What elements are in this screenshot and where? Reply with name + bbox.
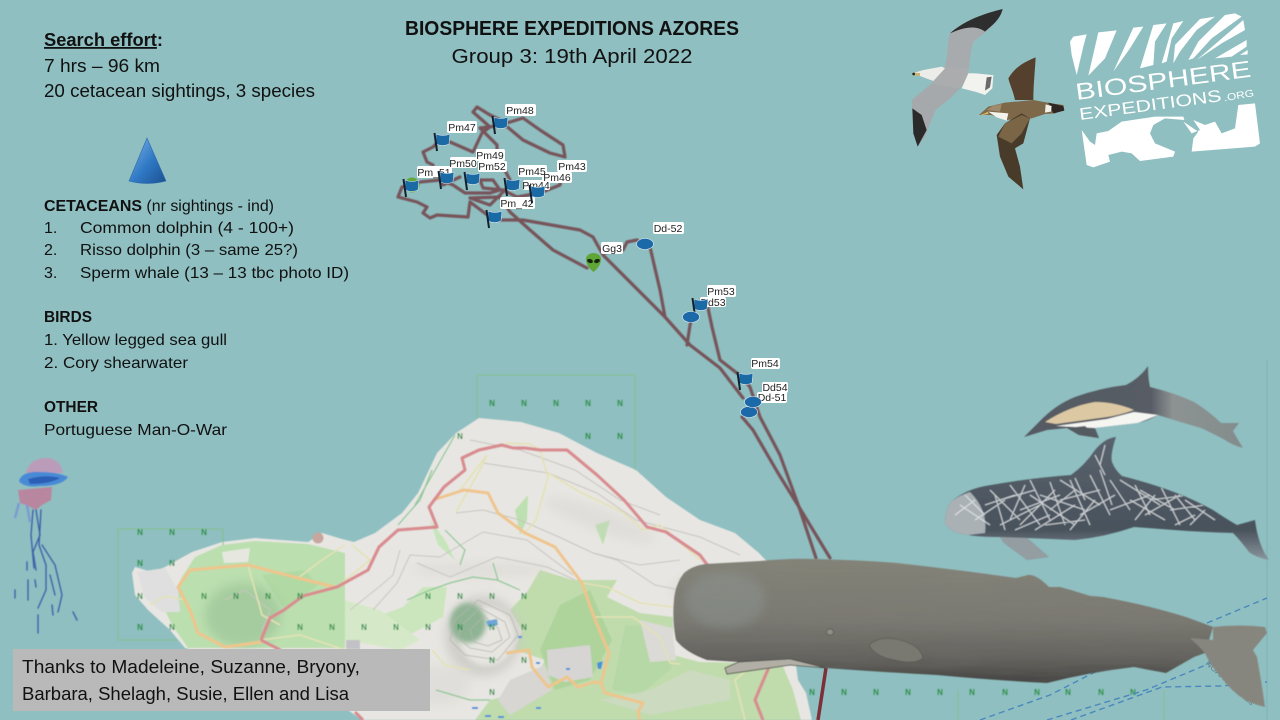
map N grid: nature reserve boxes: N — [841, 688, 847, 697]
map N grid: nature reserve boxes: N — [361, 623, 367, 632]
cetaceans: 3. — [44, 265, 57, 282]
thanks box: Barbara, Shelagh, Susie, Ellen and Lisa — [22, 684, 350, 704]
whale-side track below whale — [818, 668, 826, 720]
birds: BIRDS — [44, 309, 92, 326]
map N grid: nature reserve boxes: N — [457, 623, 463, 632]
map labels: Pm47 — [448, 122, 476, 134]
icon: yellow legged gull — [912, 9, 1003, 147]
vegetation areas — [160, 495, 801, 720]
blue water and place marks — [472, 636, 603, 718]
map N grid: nature reserve boxes: N — [1065, 688, 1071, 697]
alien markers — [404, 178, 601, 272]
blue oval markers — [636, 238, 762, 418]
other: OTHER — [44, 399, 98, 416]
map N grid: nature reserve boxes: N — [169, 623, 175, 632]
map labels: Pm53 — [707, 286, 735, 298]
map N grid: nature reserve boxes: N — [169, 528, 175, 537]
map N grid: nature reserve boxes: N — [393, 623, 399, 632]
flags — [404, 116, 753, 390]
logo wordmark: BIOSPHERE — [1074, 56, 1252, 105]
logo: Biosphere Expeditions — [1070, 13, 1260, 167]
map labels: Pm_51 — [417, 167, 451, 179]
map N grid: nature reserve boxes: N — [137, 559, 143, 568]
map N grid: nature reserve boxes: N — [1098, 688, 1104, 697]
map N grid: nature reserve boxes: N — [137, 528, 143, 537]
search effort text: Search effort: — [44, 30, 163, 50]
search effort text — [44, 30, 315, 101]
map labels: Pm45 — [518, 166, 546, 178]
map N grid: nature reserve boxes — [118, 375, 1164, 720]
NOAA label: NOAA Fisheries — [1204, 659, 1256, 707]
map labels: Pm_42 — [500, 198, 534, 210]
flag and marker sightings — [404, 116, 762, 418]
secondary roads — [150, 443, 750, 720]
map N grid: nature reserve boxes: N — [425, 623, 431, 632]
map N grid: nature reserve boxes: N — [137, 623, 143, 632]
survey track — [398, 107, 830, 558]
map N grid: nature reserve boxes: N — [521, 592, 527, 601]
map N grid: nature reserve boxes: N — [585, 399, 591, 408]
birds: 2. Cory shearwater — [44, 355, 189, 372]
map labels — [417, 104, 788, 404]
map labels: Pm50 — [449, 158, 477, 170]
map N grid: nature reserve boxes: N — [553, 399, 559, 408]
map N grid: nature reserve boxes: N — [457, 592, 463, 601]
urban grey patches — [137, 532, 730, 715]
icon: common dolphin — [1024, 366, 1243, 448]
cetaceans: Sperm whale (13 – 13 tbc photo ID) — [80, 265, 349, 282]
cetaceans: Risso dolphin (3 – same 25?) — [80, 242, 298, 259]
map N grid: nature reserve boxes: N — [169, 559, 175, 568]
logo world map — [1082, 103, 1260, 167]
map N grid: nature reserve boxes: N — [969, 688, 975, 697]
label group background — [417, 104, 788, 403]
cetaceans: 1. — [44, 220, 57, 237]
map labels: Pm48 — [506, 105, 534, 117]
icon: Risso's dolphin — [945, 437, 1269, 560]
search effort text: 20 cetacean sightings, 3 species — [44, 81, 315, 101]
map labels: Pm46 — [543, 172, 571, 184]
soft hill shading — [410, 488, 730, 705]
map N grid: nature reserve boxes: N — [457, 432, 463, 441]
logo wordmark — [1074, 56, 1255, 124]
cetaceans: Common dolphin (4 - 100+) — [80, 220, 294, 237]
logo wordmark: .ORG — [1223, 88, 1255, 104]
map labels: Pm44 — [522, 180, 550, 192]
map N grid: nature reserve boxes: N — [265, 592, 271, 601]
map N grid: nature reserve boxes: N — [873, 688, 879, 697]
NOAA fisheries boundary lines — [980, 360, 1267, 720]
map labels: Pm43 — [558, 161, 586, 173]
map labels: Pm49 — [476, 150, 504, 162]
map N grid: nature reserve boxes: N — [297, 623, 303, 632]
map N grid: nature reserve boxes: N — [489, 623, 495, 632]
birds: 1. Yellow legged sea gull — [44, 332, 227, 349]
logo wordmark: EXPEDITIONS — [1078, 86, 1223, 124]
map labels: Dd54 — [762, 382, 788, 394]
map labels: Dd-51 — [758, 392, 786, 404]
pink primary road — [261, 445, 769, 720]
title — [405, 18, 739, 68]
thanks box — [13, 649, 430, 711]
map labels: Dd-52 — [654, 223, 682, 235]
logo stripes — [1070, 13, 1248, 76]
whale eye — [826, 629, 834, 635]
map N grid: nature reserve boxes: N — [937, 688, 943, 697]
map N grid: nature reserve boxes: N — [233, 592, 239, 601]
whale tail fluke — [1190, 626, 1267, 707]
map N grid: nature reserve boxes: N — [1034, 688, 1040, 697]
whale head highlight — [685, 572, 765, 628]
western volcano shading — [205, 583, 281, 647]
map N grid: nature reserve boxes: N — [1002, 688, 1008, 697]
contour lines — [225, 440, 740, 630]
map labels: Pm52 — [478, 161, 506, 173]
whale jaw — [725, 659, 826, 674]
other: Portuguese Man-O-War — [44, 422, 228, 439]
cetaceans — [44, 198, 349, 282]
species list — [44, 198, 349, 439]
birds — [44, 309, 227, 372]
green lines — [398, 435, 520, 700]
map N grid: nature reserve boxes: N — [201, 592, 207, 601]
map N grid: nature reserve boxes: N — [617, 399, 623, 408]
map N grid: nature reserve boxes: N — [521, 399, 527, 408]
map labels: Pm54 — [751, 358, 779, 370]
map N grid: nature reserve boxes: N — [489, 688, 495, 697]
map N grid: nature reserve boxes: N — [329, 623, 335, 632]
map N grid: nature reserve boxes: N — [489, 592, 495, 601]
island land mass — [132, 418, 812, 720]
map N grid: nature reserve boxes: N — [617, 432, 623, 441]
icon: sperm whale — [670, 555, 1267, 707]
map N grid: nature reserve boxes: N — [201, 528, 207, 537]
icon: Cory's shearwater — [979, 57, 1064, 189]
map N grid: nature reserve boxes: N — [489, 399, 495, 408]
map N grid: nature reserve boxes: N — [905, 688, 911, 697]
map N grid: nature reserve boxes: N — [809, 688, 815, 697]
map N grid: nature reserve boxes: N — [297, 592, 303, 601]
icon: Portuguese man-o-war — [15, 458, 77, 633]
map: Faial island — [118, 375, 1164, 720]
title: Group 3: 19th April 2022 — [452, 46, 692, 68]
map N grid: nature reserve boxes: N — [1130, 688, 1136, 697]
orange main road — [178, 490, 643, 720]
map N grid: nature reserve boxes: N — [585, 432, 591, 441]
title: BIOSPHERE EXPEDITIONS AZORES — [405, 18, 739, 40]
map N grid: nature reserve boxes: N — [521, 656, 527, 665]
central caldera — [445, 596, 521, 676]
map N grid: nature reserve boxes: N — [489, 656, 495, 665]
whale flipper — [869, 638, 923, 662]
search effort text: 7 hrs – 96 km — [44, 56, 160, 76]
whale skin texture — [680, 578, 681, 579]
thanks box: Thanks to Madeleine, Suzanne, Bryony, — [22, 657, 360, 677]
map N grid: nature reserve boxes: N — [521, 623, 527, 632]
icon: blue cone — [129, 138, 166, 184]
map labels: Gg3 — [602, 243, 622, 255]
map labels: Dd53 — [700, 297, 726, 309]
map N grid: nature reserve boxes: N — [425, 592, 431, 601]
other — [44, 399, 228, 439]
map N grid: nature reserve boxes: N — [137, 592, 143, 601]
cetaceans: CETACEANS (nr sightings - ind) — [44, 198, 274, 215]
cetaceans: 2. — [44, 242, 57, 259]
